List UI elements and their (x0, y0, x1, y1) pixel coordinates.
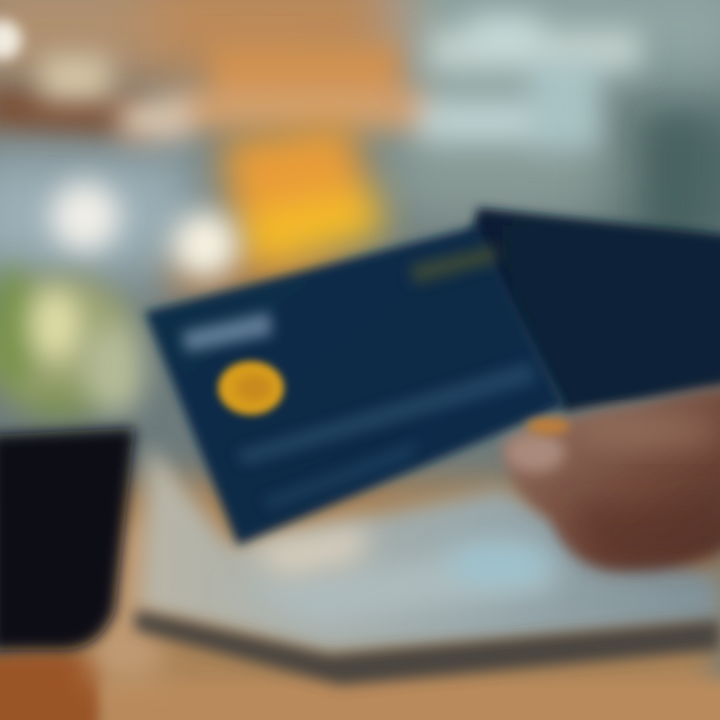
front credit card (145, 226, 565, 545)
yellow glow (170, 120, 385, 298)
plant (0, 265, 145, 421)
white bokeh lights (0, 20, 238, 278)
card lower detail (260, 440, 420, 510)
card number (235, 362, 536, 465)
black plant pot (0, 428, 135, 650)
wooden table (0, 480, 720, 720)
hand holding card (505, 385, 720, 571)
gold chip (218, 361, 284, 415)
blurred orange and white shelf highlights (40, 15, 640, 150)
laptop (135, 445, 720, 685)
fingernail (526, 418, 570, 434)
gold card lettering (410, 245, 497, 284)
card logo (182, 312, 272, 352)
back credit card (470, 208, 720, 412)
